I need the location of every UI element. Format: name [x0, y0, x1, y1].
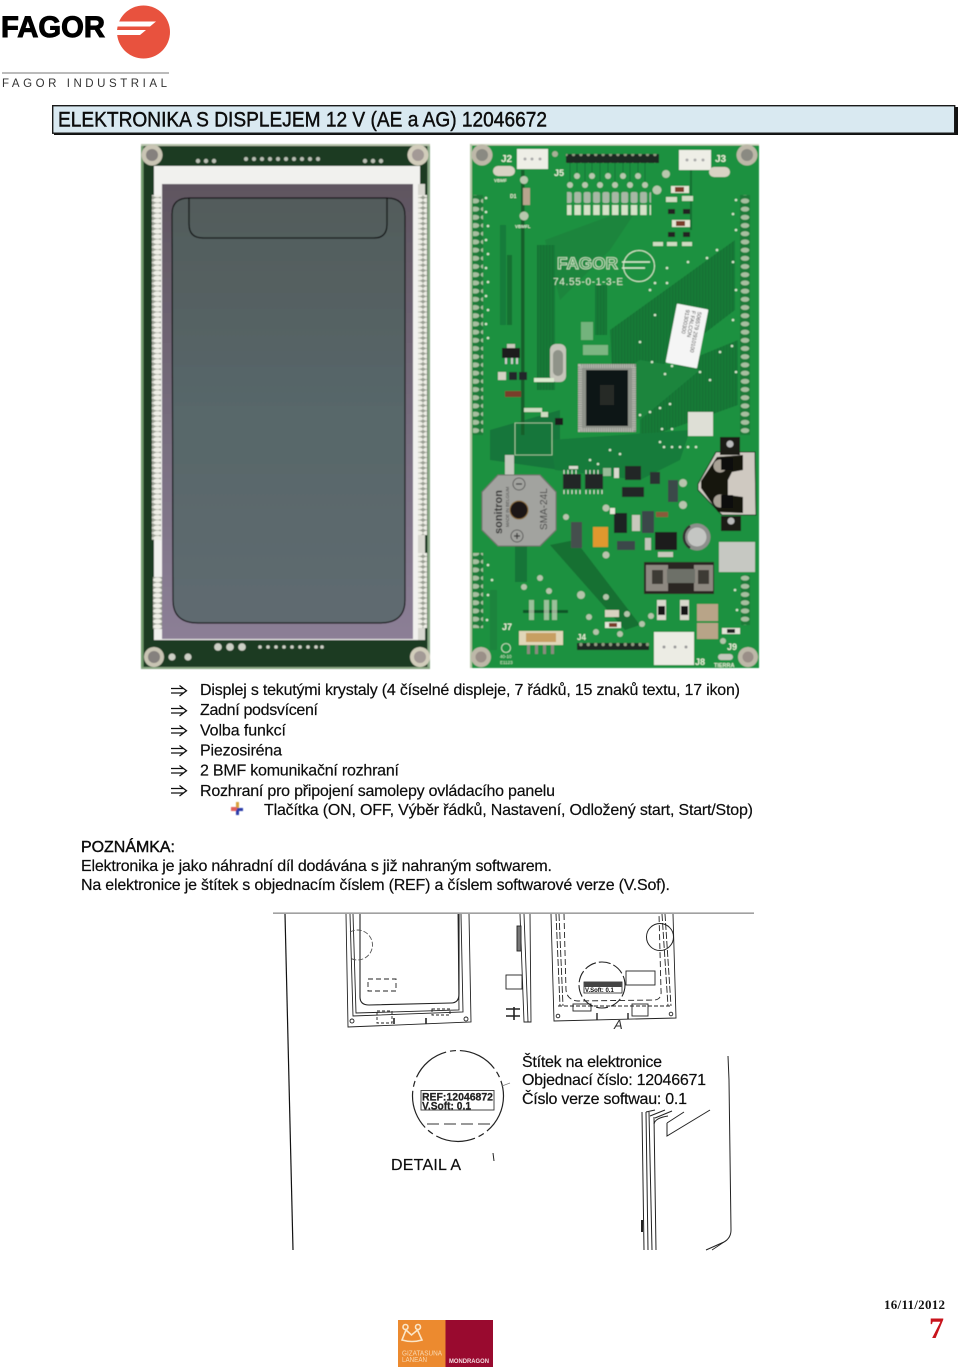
piezo buzzer: MADE IN BELGIUM: [505, 486, 510, 527]
LCD window: [172, 198, 405, 623]
feature list: [171, 681, 753, 819]
label description: Objednací číslo: 12046671: [522, 1072, 706, 1089]
note: Na elektronice je štítek s objednacím číslem (REF) a číslem softwarové verze (V.Sof).: [81, 877, 670, 894]
footer logo: Mondragon: MONDRAGON: [449, 1358, 489, 1365]
note: [81, 837, 670, 894]
list sub-item with icon: Tlačítka (ON, OFF, Výběr řádků, Nastavení, Odložený start, Start/Stop): [264, 801, 753, 819]
corner holes: [471, 144, 758, 667]
list item 1: Displej s tekutými krystaly (4 číselné displeje, 7 řádků, 15 znaků textu, 17 ikon): [200, 681, 740, 699]
list item 4: Piezosiréna: [200, 742, 282, 760]
connectors J4 J7 J8: J8: [695, 657, 705, 667]
detail label text: REF:12046872: [422, 1092, 493, 1104]
title bar: [53, 106, 958, 135]
connectors J4 J7 J8: [500, 622, 737, 669]
board FAGOR logo: [553, 250, 654, 288]
small label in back view: V.Soft: 0.1: [585, 988, 614, 994]
drawing: back view of board with label: [551, 914, 676, 1021]
connectors J2 J3: VBMFL: [515, 224, 531, 229]
lower parts: [521, 575, 740, 644]
list item 2: Zadní podsvícení: [200, 702, 319, 719]
drawing: letter A: A: [613, 1017, 623, 1032]
note text: Elektronika je jako náhradní díl dodávána s již nahraným softwarem.: [81, 858, 552, 875]
date: 16/11/2012: [884, 1297, 945, 1312]
SMD parts top right: [653, 186, 693, 246]
LCD top segment: [189, 198, 387, 238]
note heading: POZNÁMKA:: [81, 837, 175, 856]
connectors J4 J7 J8: J4: [577, 633, 586, 642]
sticker label: 506579 2910100: [688, 311, 702, 353]
mounting holes: [142, 144, 430, 667]
list item 3: Volba funkcí: [200, 722, 287, 740]
connectors J4 J7 J8: TIERRA: [714, 663, 734, 669]
connectors J2 J3: J3: [715, 154, 727, 165]
piezo buzzer: [482, 455, 556, 546]
fuse holder F1: [644, 562, 714, 594]
footer logo: Mondragon: [398, 1320, 493, 1367]
white test squares: [688, 412, 755, 572]
list item 6: Rozhraní pro připojení samolepy ovládacího panelu: [200, 783, 555, 800]
page number: 7: [929, 1312, 944, 1345]
drawing: detail circle: V.Soft: 0.1: [422, 1100, 471, 1112]
sticker label: F FALCON: [685, 310, 696, 338]
footer logo text: GIZATASUNA: [402, 1348, 442, 1358]
drawing: detail circle: [412, 1050, 510, 1161]
detail caption: DETAIL A: [391, 1157, 461, 1174]
connectors J4 J7 J8: J9: [727, 642, 737, 652]
sticker label: [666, 303, 708, 369]
logo: FAGOR Industrial: [1, 6, 170, 90]
piezo buzzer: sonitron: [493, 490, 505, 534]
dark copper traces: [490, 170, 738, 650]
connectors J2 J3: J5: [554, 168, 564, 178]
logo tagline: FAGOR INDUSTRIAL: [2, 78, 168, 90]
crystal X1: [550, 344, 566, 382]
connectors J4 J7 J8: 40-10: [500, 654, 512, 659]
solder points top: [196, 157, 383, 163]
drawing: enlarged board corner: [642, 1056, 731, 1250]
label description: Štítek na elektronice: [522, 1052, 662, 1071]
icon: crown: [402, 1324, 422, 1342]
bead rows: [152, 195, 427, 629]
label description: [522, 1052, 706, 1108]
connectors J2 J3: [493, 149, 730, 229]
small label in back view: [584, 982, 622, 994]
header J5 and test pads: [520, 154, 670, 220]
logo wordmark: FAGOR: [1, 11, 105, 44]
connectors J2 J3: VBMF: [494, 178, 507, 183]
technical drawing: [273, 912, 754, 1250]
electrolytic capacitor: [684, 524, 710, 550]
drawing: front view of board: [346, 914, 471, 1027]
piezo buzzer: SMA-24L: [539, 488, 550, 530]
drawing: side view of board: [506, 914, 531, 1022]
processor chip: [578, 364, 636, 432]
connectors J4 J7 J8: E1123: [500, 660, 513, 665]
integrated circuits and capacitors: [563, 466, 687, 558]
footer logo: Mondragon: LANEAN: [402, 1355, 427, 1364]
solder points bottom: [168, 643, 324, 660]
list item 5: 2 BMF komunikační rozhraní: [200, 762, 400, 780]
title text: ELEKTRONIKA S DISPLEJEM 12 V (AE a AG) 12046672: [58, 108, 547, 132]
battery holder: [698, 437, 756, 531]
edge pad rows: [473, 195, 750, 628]
small parts left middle: [498, 322, 608, 455]
connectors J2 J3: D1: [510, 194, 517, 200]
board FAGOR logo: 74.55-0-1-3-E: [553, 277, 623, 288]
sticker label: 91300300: [679, 309, 690, 334]
photo: display board front: [141, 144, 430, 669]
logo emblem: [114, 6, 170, 58]
connectors J4 J7 J8: J7: [502, 622, 512, 632]
icon: colored cross: [231, 802, 243, 815]
photo: circuit board back: [470, 144, 759, 669]
connectors J2 J3: J2: [501, 154, 513, 165]
board FAGOR logo: FAGOR: [557, 254, 618, 273]
via dots: [485, 197, 738, 621]
label description: Číslo verze softwau: 0.1: [522, 1089, 687, 1108]
